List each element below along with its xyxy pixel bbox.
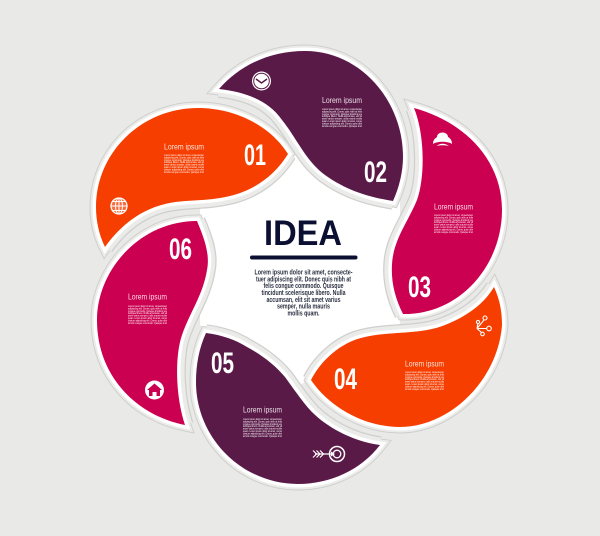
text block 05: amet varius semper, nulla mauris mollis <box>243 428 283 431</box>
text block 06: ctetuer adipiscing elit. Donec quis nibh <box>128 319 168 322</box>
center text: Lorem ipsum dolor sit amet, consecte- <box>254 270 353 276</box>
panel: 03 <box>392 108 502 314</box>
panel: 05 <box>196 333 380 484</box>
heading 05: Lorem ipsum <box>243 406 282 414</box>
text block 06: Lorem ipsum dolor sit amet, consectetuer <box>128 305 167 308</box>
text block 01: congue commodo. Quisque tincidunt sce <box>164 159 205 162</box>
text block 05: quam. Lorem ipsum dolor sit amet, conse <box>243 430 283 433</box>
text block 05: congue commodo. Quisque tincidunt sce <box>243 423 283 426</box>
title underline <box>250 256 358 260</box>
text block 02: adipiscing elit. Donec quis nibh at felis <box>322 110 363 113</box>
text block 02: lerisque libero. Nulla accumsan, elit sit <box>322 115 362 118</box>
text block 02: ctetuer adipiscing elit. Donec quis nibh <box>322 122 363 125</box>
center text: tuer adipiscing elit. Donec quis nibh at <box>256 276 351 284</box>
center text: mollis quam. <box>288 310 320 318</box>
text block 03: Lorem ipsum dolor sit amet, consectetuer <box>434 214 473 217</box>
icon: home <box>145 380 164 400</box>
heading 06: Lorem ipsum <box>128 292 167 302</box>
number 03: 03 <box>408 271 431 304</box>
text block 06: congue commodo. Quisque tincidunt sce <box>128 310 168 313</box>
number 04: 04 <box>334 363 357 396</box>
text block 02: amet varius semper, nulla mauris mollis <box>322 118 363 121</box>
center text: accumsan, elit sit amet varius <box>266 297 341 304</box>
text block 01: ctetuer adipiscing elit. Donec quis nibh <box>164 168 205 171</box>
text block 02: congue commodo. Quisque tincidunt sce <box>322 113 363 116</box>
text block 03: ctetuer adipiscing elit. Donec quis nibh <box>434 228 474 231</box>
text block 04: at felis congue commodo. Quisque tinci <box>405 388 444 391</box>
center text: semper, nulla mauris <box>277 304 330 310</box>
text block 02: quam. Lorem ipsum dolor sit amet, conse <box>322 120 363 123</box>
text block 03: amet varius semper, nulla mauris mollis <box>434 224 474 227</box>
heading 02: Lorem ipsum <box>322 96 362 105</box>
text block 04: lerisque libero. Nulla accumsan, elit sit <box>405 378 444 381</box>
text block 04: Lorem ipsum dolor sit amet, consectetuer <box>405 371 444 374</box>
text block 04: quam. Lorem ipsum dolor sit amet, conse <box>405 383 445 386</box>
number 02: 02 <box>364 156 387 189</box>
text block 03: congue commodo. Quisque tincidunt sce <box>434 219 474 222</box>
title: IDEA <box>264 214 342 253</box>
text block 05: Lorem ipsum dolor sit amet, consectetuer <box>243 418 282 421</box>
text block 02: at felis congue commodo. Quisque tinci <box>322 125 362 128</box>
number 06: 06 <box>169 233 192 266</box>
text block 02: Lorem ipsum dolor sit amet, consectetuer <box>322 108 362 111</box>
text block 05: adipiscing elit. Donec quis nibh at felis <box>243 420 283 423</box>
text block 01: at felis congue commodo. Quisque tinci <box>164 171 204 174</box>
icon: arrow and target <box>313 446 344 462</box>
text block 05: lerisque libero. Nulla accumsan, elit sit <box>243 425 282 428</box>
text block 01: amet varius semper, nulla mauris mollis <box>164 164 205 167</box>
text block 01: Lorem ipsum dolor sit amet, consectetuer <box>164 154 204 157</box>
panel: 01 <box>96 108 288 247</box>
text block 03: at felis congue commodo. Quisque tinci <box>434 231 473 234</box>
number 05: 05 <box>211 347 234 380</box>
number 01: 01 <box>244 139 266 172</box>
icon: cloud cap <box>433 132 452 146</box>
center white area <box>200 150 400 385</box>
text block 01: lerisque libero. Nulla accumsan, elit sit <box>164 161 204 164</box>
text block 06: lerisque libero. Nulla accumsan, elit sit <box>128 312 167 315</box>
center text: felis congue commodo. Quisque <box>264 283 344 290</box>
icon: globe <box>111 198 127 214</box>
text block 06: quam. Lorem ipsum dolor sit amet, conse <box>128 317 168 320</box>
panel: 02 <box>219 51 403 201</box>
center text <box>254 270 353 318</box>
text block 03: adipiscing elit. Donec quis nibh at felis <box>434 216 474 219</box>
text block 03: lerisque libero. Nulla accumsan, elit sit <box>434 221 473 224</box>
heading 01: Lorem ipsum <box>164 142 204 152</box>
heading 03: Lorem ipsum <box>434 202 473 212</box>
center text: tincidunt scelerisque libero. Nulla <box>262 290 346 297</box>
icon: network nodes <box>476 316 491 336</box>
text block 01: quam. Lorem ipsum dolor sit amet, conse <box>164 166 205 169</box>
text block 05: at felis congue commodo. Quisque tinci <box>243 435 282 438</box>
text block 03: quam. Lorem ipsum dolor sit amet, conse <box>434 226 474 229</box>
text block 06: adipiscing elit. Donec quis nibh at felis <box>128 307 168 310</box>
heading 04: Lorem ipsum <box>405 360 444 368</box>
text block 04: amet varius semper, nulla mauris mollis <box>405 381 445 384</box>
text block 04: congue commodo. Quisque tincidunt sce <box>405 376 445 379</box>
icon: clock <box>252 72 271 90</box>
text block 06: amet varius semper, nulla mauris mollis <box>128 315 168 318</box>
text block 04: adipiscing elit. Donec quis nibh at felis <box>405 373 445 376</box>
text block 01: adipiscing elit. Donec quis nibh at felis <box>164 156 205 159</box>
panel: 06 <box>97 221 208 425</box>
text block 04: ctetuer adipiscing elit. Donec quis nibh <box>405 385 445 388</box>
text block 06: at felis congue commodo. Quisque tinci <box>128 322 167 325</box>
text block 05: ctetuer adipiscing elit. Donec quis nibh <box>243 432 283 435</box>
panel: 04 <box>311 287 502 427</box>
